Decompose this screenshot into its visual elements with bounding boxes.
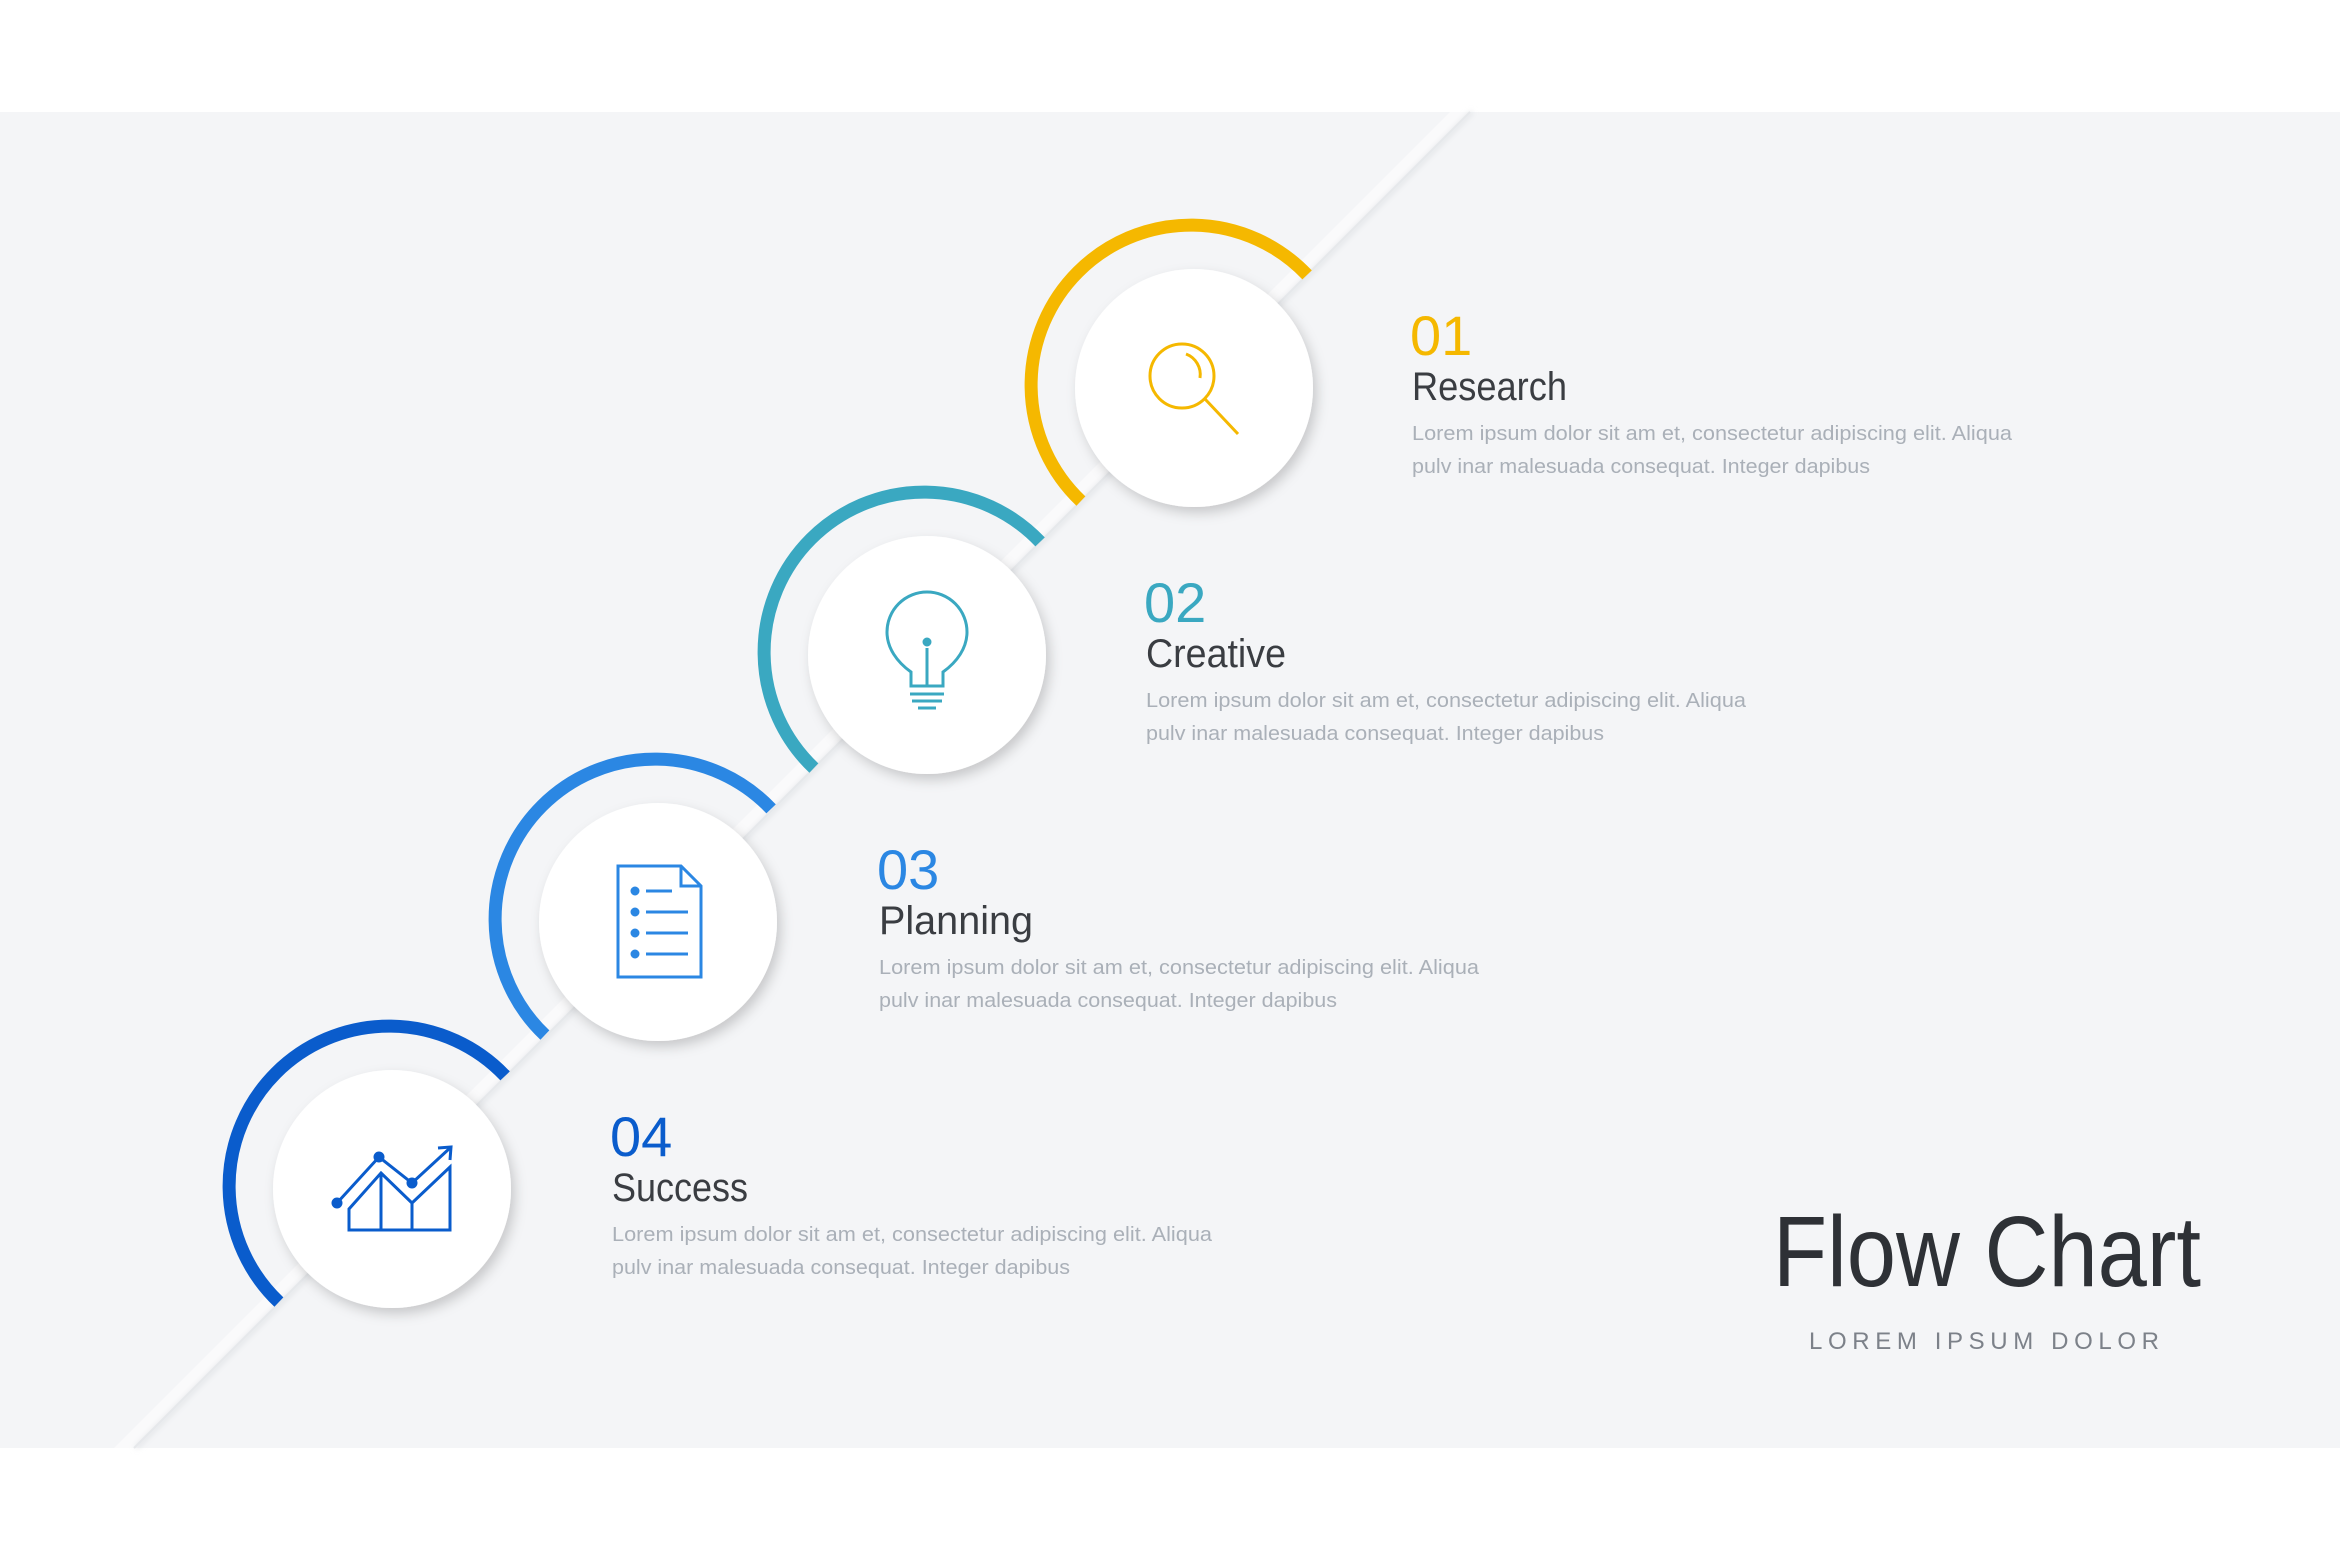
step 1: research	[1031, 225, 1313, 507]
text: step 1	[1410, 304, 2013, 478]
text: step 3: Lorem ipsum dolor sit am et, consectetur adipiscing elit. Aliqua	[879, 957, 1480, 979]
text: step 1: Lorem ipsum dolor sit am et, consectetur adipiscing elit. Aliqua	[1412, 423, 2013, 445]
subtitle: LOREM IPSUM DOLOR	[1809, 1328, 2159, 1355]
icon: light bulb	[887, 592, 967, 708]
text: step 4: pulv inar malesuada consequat. Integer dapibus	[612, 1257, 1070, 1279]
diagonal band	[114, 112, 1472, 1448]
step 4: success	[229, 1026, 511, 1308]
title	[1773, 1196, 2201, 1355]
title: Flow Chart	[1773, 1196, 2201, 1308]
text: step 3: Planning	[879, 899, 1033, 943]
text: step 4	[610, 1105, 1213, 1279]
icon: magnifier	[1150, 344, 1238, 434]
text: step 1: Research	[1412, 365, 1567, 409]
step 2: creative	[764, 492, 1046, 774]
text: step 1: 01	[1410, 304, 1472, 367]
text: step 2: 02	[1144, 571, 1206, 634]
text: step 4: 04	[610, 1105, 672, 1168]
text: step 2: Lorem ipsum dolor sit am et, consectetur adipiscing elit. Aliqua	[1146, 690, 1747, 712]
icon: growth chart	[333, 1147, 451, 1230]
text: step 4: Success	[612, 1166, 748, 1210]
text: step 3: 03	[877, 838, 939, 901]
text: step 2: pulv inar malesuada consequat. Integer dapibus	[1146, 723, 1604, 745]
text: step 2: Creative	[1146, 632, 1286, 676]
step 3: planning	[495, 759, 777, 1041]
icon: document	[618, 866, 701, 977]
text: step 2	[1144, 571, 1747, 745]
text: step 1: pulv inar malesuada consequat. Integer dapibus	[1412, 456, 1870, 478]
text: step 3	[877, 838, 1480, 1012]
text: step 4: Lorem ipsum dolor sit am et, consectetur adipiscing elit. Aliqua	[612, 1224, 1213, 1246]
text: step 3: pulv inar malesuada consequat. Integer dapibus	[879, 990, 1337, 1012]
